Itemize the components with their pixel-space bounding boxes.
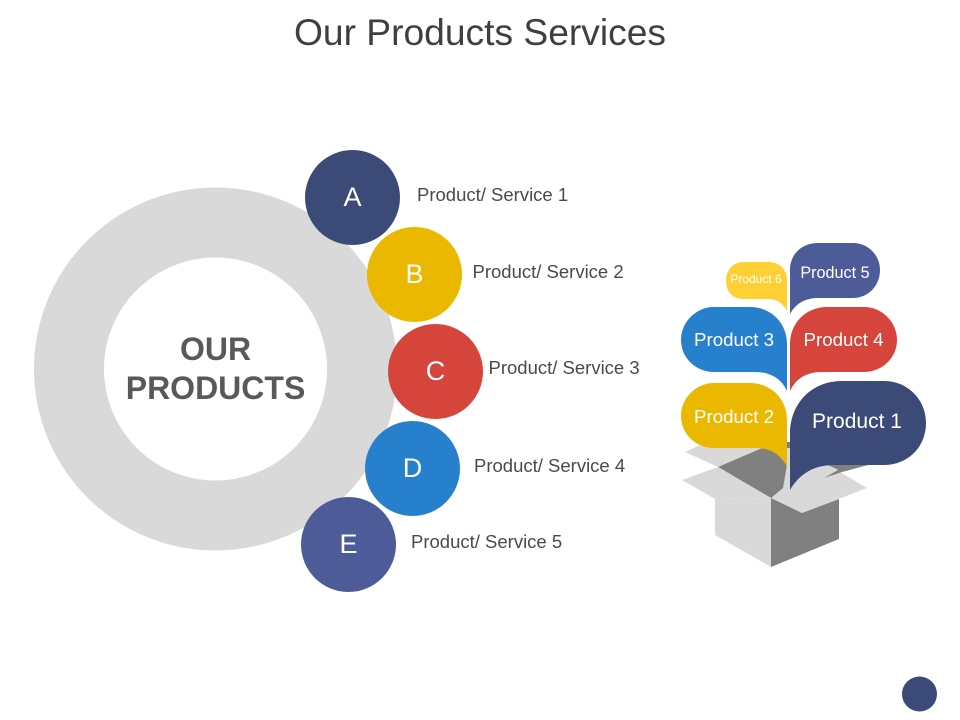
circle D: D bbox=[403, 453, 422, 483]
bubble: product 6 bbox=[726, 262, 787, 311]
bubble: product 5 bbox=[790, 243, 880, 314]
bubble: product 5: Product 5 bbox=[800, 264, 870, 282]
title: Our Products Services bbox=[294, 11, 666, 53]
circle A: A bbox=[343, 182, 362, 212]
donut: our products bbox=[69, 222, 362, 516]
bubble: product 6: Product 6 bbox=[730, 272, 782, 286]
bubble: product 4 bbox=[790, 307, 897, 391]
circle A bbox=[305, 150, 400, 245]
circle C bbox=[388, 324, 483, 419]
bubble: product 3 bbox=[681, 307, 787, 391]
label service 3: Product/ Service 3 bbox=[488, 357, 640, 378]
label service 2: Product/ Service 2 bbox=[472, 261, 624, 282]
circle E bbox=[301, 497, 396, 592]
label service 4: Product/ Service 4 bbox=[474, 455, 625, 476]
bubble: product 1: Product 1 bbox=[812, 410, 902, 433]
bubble: product 2 bbox=[681, 383, 787, 467]
bubble: product 2: Product 2 bbox=[694, 406, 774, 427]
donut label: PRODUCTS bbox=[126, 370, 305, 406]
bubble: product 1 bbox=[790, 381, 926, 490]
icon: open box bbox=[682, 436, 868, 567]
page marker dot bbox=[902, 676, 937, 712]
label service 1: Product/ Service 1 bbox=[417, 184, 568, 205]
donut label: OUR bbox=[180, 331, 251, 367]
bubble: product 3: Product 3 bbox=[694, 329, 774, 350]
bubble: product 4: Product 4 bbox=[804, 329, 884, 350]
circle B: B bbox=[405, 259, 424, 289]
circle B bbox=[367, 227, 462, 322]
circle D bbox=[365, 421, 460, 516]
label service 5: Product/ Service 5 bbox=[411, 531, 562, 552]
circle E: E bbox=[339, 529, 358, 559]
circle C: C bbox=[426, 356, 445, 386]
